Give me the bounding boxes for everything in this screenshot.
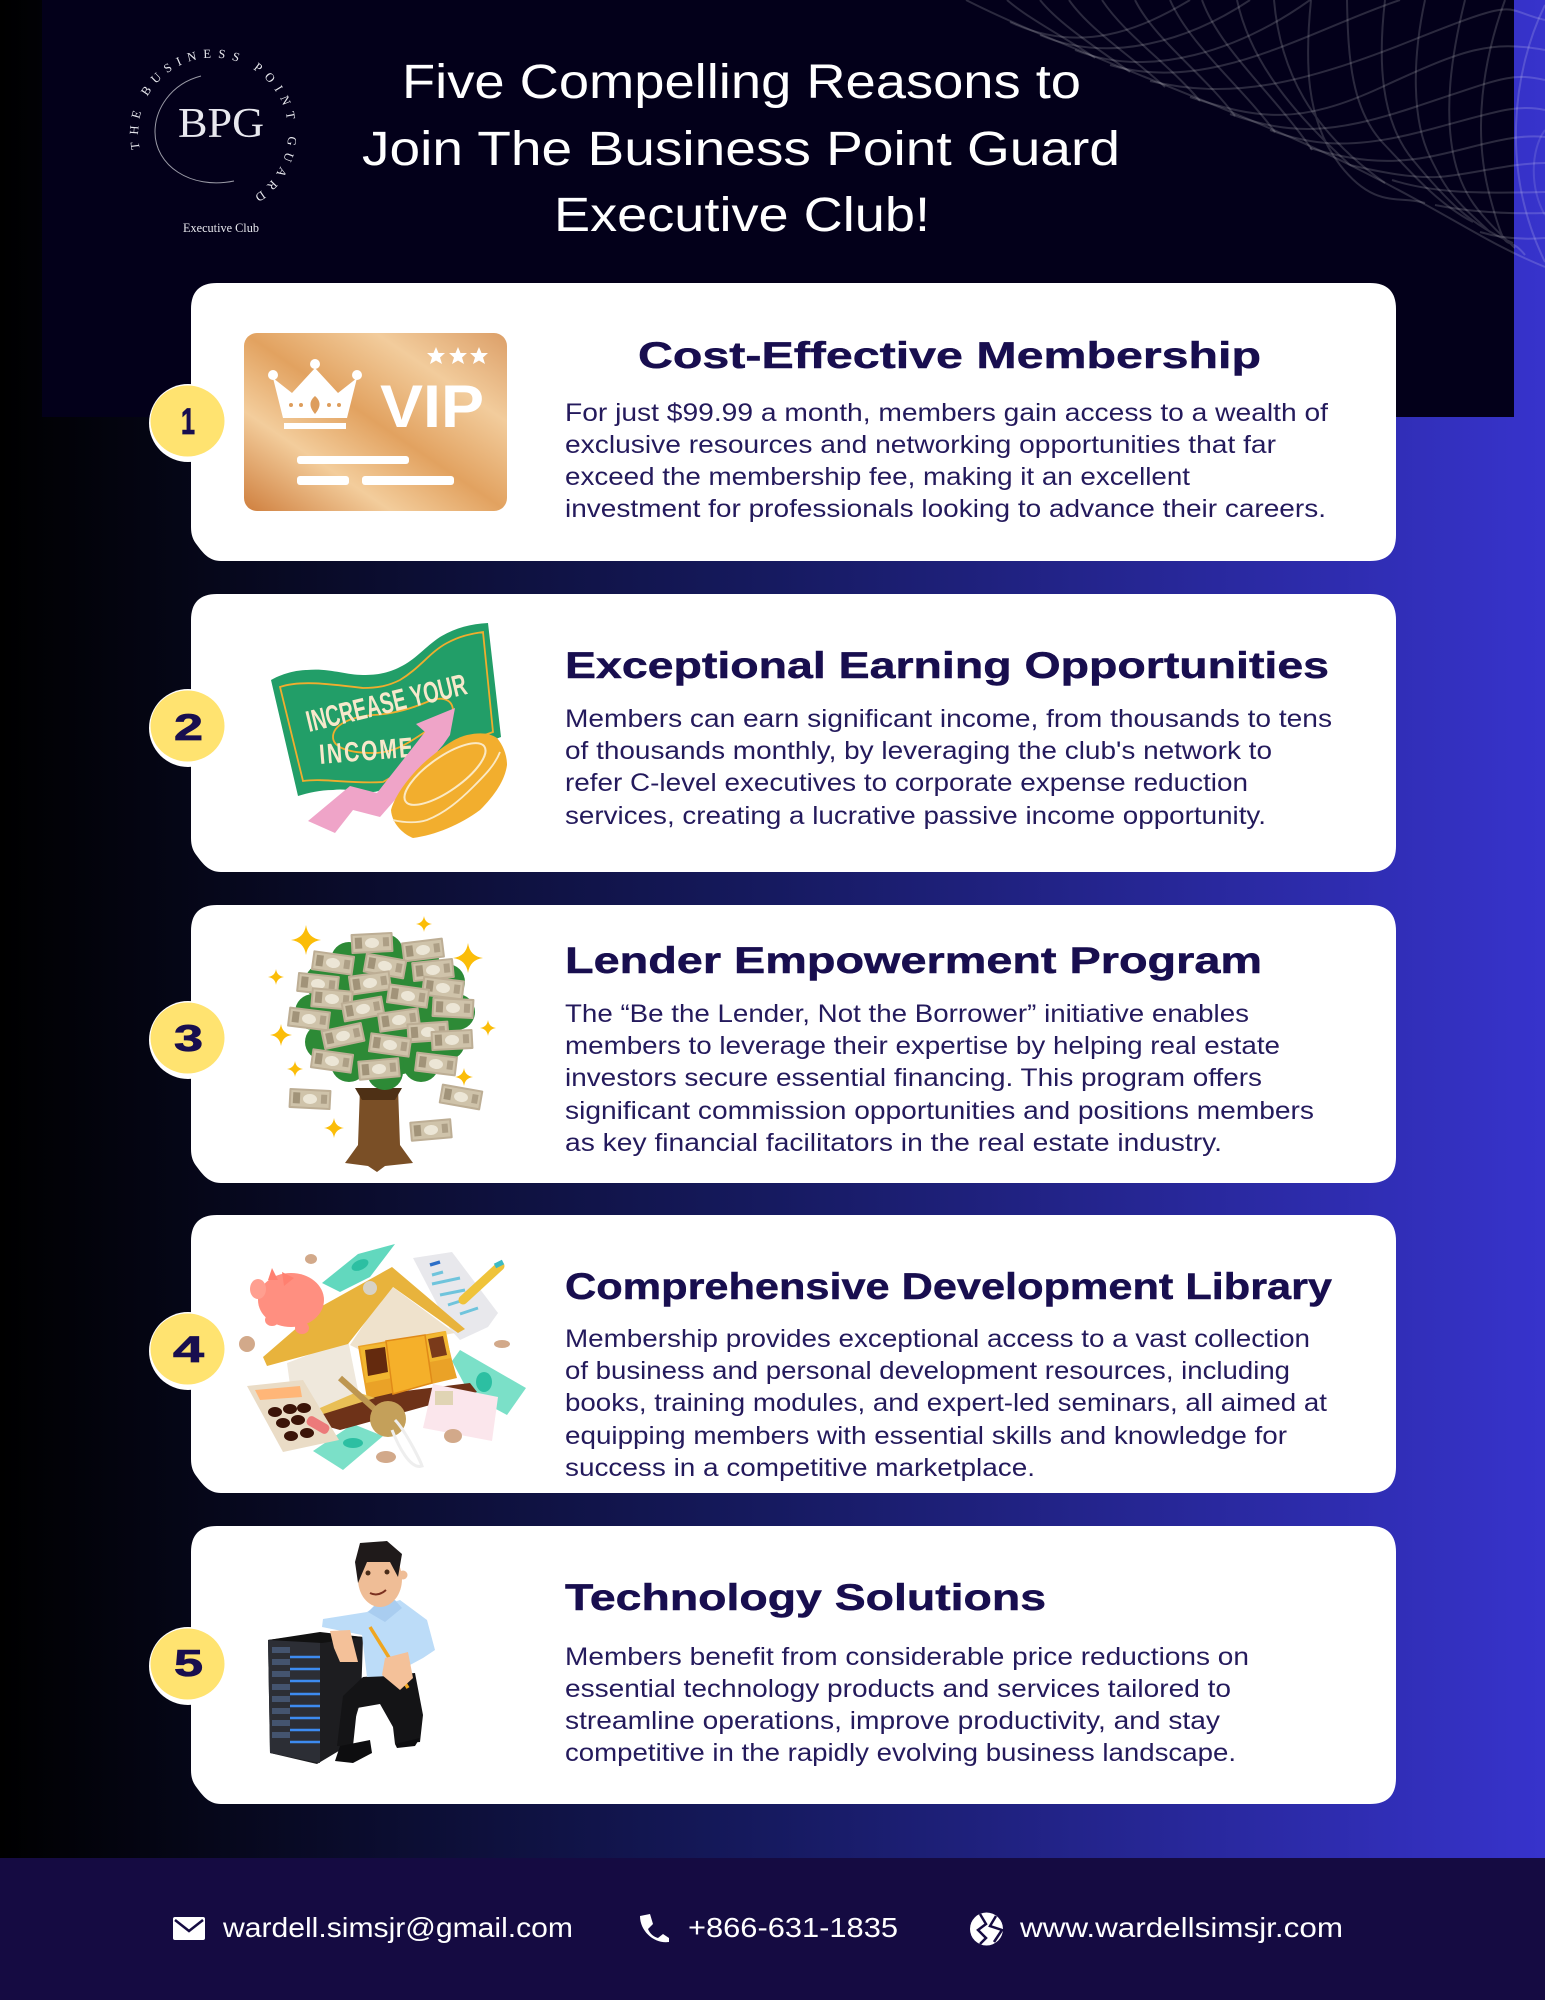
- icon: increase your income: INCOME: [318, 733, 414, 771]
- heading 3: Lender Empowerment Program: [565, 940, 1262, 981]
- body 4: [565, 1325, 1327, 1482]
- body 4: equipping members with essential skills and knowledge for: [565, 1422, 1287, 1450]
- badge 5: [149, 1627, 227, 1705]
- title: Executive Club!: [554, 189, 930, 242]
- body 1: For just $99.99 a month, members gain access to a wealth of: [565, 399, 1328, 427]
- website: www.wardellsimsjr.com: [1019, 1912, 1343, 1943]
- body 2: of thousands monthly, by leveraging the club's network to: [565, 737, 1272, 765]
- logo monogram: BPG: [178, 101, 264, 147]
- title: [362, 56, 1120, 242]
- icon: phone: [640, 1914, 669, 1942]
- card 2: exceptional earning opportunities: [149, 594, 1396, 872]
- badge 2: 2: [174, 707, 203, 748]
- heading 4: Comprehensive Development Library: [565, 1266, 1332, 1307]
- body 5: competitive in the rapidly evolving business landscape.: [565, 1739, 1236, 1767]
- badge 1: 1: [181, 401, 195, 442]
- body 5: [565, 1643, 1249, 1767]
- icon: house and finances: [239, 1244, 526, 1470]
- icon: email: [173, 1917, 205, 1940]
- body 1: exceed the membership fee, making it an excellent: [565, 463, 1190, 491]
- header panel: [42, 0, 1514, 417]
- heading 5: Technology Solutions: [565, 1577, 1046, 1618]
- body 5: streamline operations, improve productivity, and stay: [565, 1707, 1221, 1735]
- badge 4: [149, 1312, 227, 1390]
- heading 1: Cost-Effective Membership: [638, 335, 1261, 376]
- body 3: The “Be the Lender, Not the Borrower” initiative enables: [565, 1000, 1249, 1028]
- body 3: investors secure essential financing. This program offers: [565, 1064, 1262, 1092]
- body 3: [565, 1000, 1314, 1157]
- badge 5: 5: [174, 1643, 203, 1684]
- body 2: [565, 705, 1332, 830]
- body 3: significant commission opportunities and positions members: [565, 1097, 1314, 1125]
- title: Join The Business Point Guard: [362, 123, 1120, 176]
- body 2: services, creating a lucrative passive income opportunity.: [565, 802, 1266, 830]
- body 3: members to leverage their expertise by helping real estate: [565, 1032, 1280, 1060]
- icon: VIP card: [244, 333, 507, 511]
- icon: increase your income: [271, 623, 507, 838]
- logo: [130, 50, 296, 235]
- body 1: exclusive resources and networking opportunities that far: [565, 431, 1276, 459]
- heading 2: Exceptional Earning Opportunities: [565, 645, 1329, 686]
- badge 3: 3: [174, 1018, 203, 1059]
- body 5: essential technology products and services tailored to: [565, 1675, 1231, 1703]
- card 4: comprehensive development library: [149, 1215, 1396, 1493]
- body 4: Membership provides exceptional access to a vast collection: [565, 1325, 1310, 1353]
- phone number: +866-631-1835: [688, 1912, 898, 1943]
- body 5: Members benefit from considerable price reductions on: [565, 1643, 1249, 1671]
- logo inner arc: [155, 76, 234, 183]
- badge 4: 4: [173, 1329, 205, 1370]
- body 2: refer C-level executives to corporate expense reduction: [565, 769, 1248, 797]
- icon: money tree: [268, 916, 496, 1172]
- title: Five Compelling Reasons to: [402, 56, 1081, 109]
- body 4: books, training modules, and expert-led seminars, all aimed at: [565, 1389, 1327, 1417]
- body 4: of business and personal development resources, including: [565, 1357, 1290, 1385]
- body 3: as key financial facilitators in the real estate industry.: [565, 1129, 1222, 1157]
- card 3: lender empowerment program: [149, 905, 1396, 1183]
- icon: increase your income: INCREASE YOUR: [303, 668, 470, 739]
- icon: VIP card: VIP: [380, 373, 484, 440]
- logo ring text: THE BUSINESS POINT GUARD: [130, 50, 296, 200]
- body 1: investment for professionals looking to advance their careers.: [565, 495, 1326, 523]
- badge 1: [149, 384, 227, 462]
- badge 2: [149, 689, 227, 767]
- footer: [0, 1858, 1545, 2000]
- logo caption: Executive Club: [183, 220, 259, 235]
- email address: wardell.simsjr@gmail.com: [222, 1912, 573, 1943]
- body 1: [565, 399, 1328, 523]
- icon: globe: [970, 1912, 1003, 1946]
- wire mesh decoration: [966, 0, 1545, 267]
- badge 3: [149, 1001, 227, 1079]
- card 1: cost-effective membership: [149, 283, 1396, 561]
- body 4: success in a competitive marketplace.: [565, 1454, 1035, 1482]
- body 2: Members can earn significant income, from thousands to tens: [565, 705, 1332, 733]
- icon: technician with server: [268, 1541, 435, 1764]
- card 5: technology solutions: [149, 1526, 1396, 1804]
